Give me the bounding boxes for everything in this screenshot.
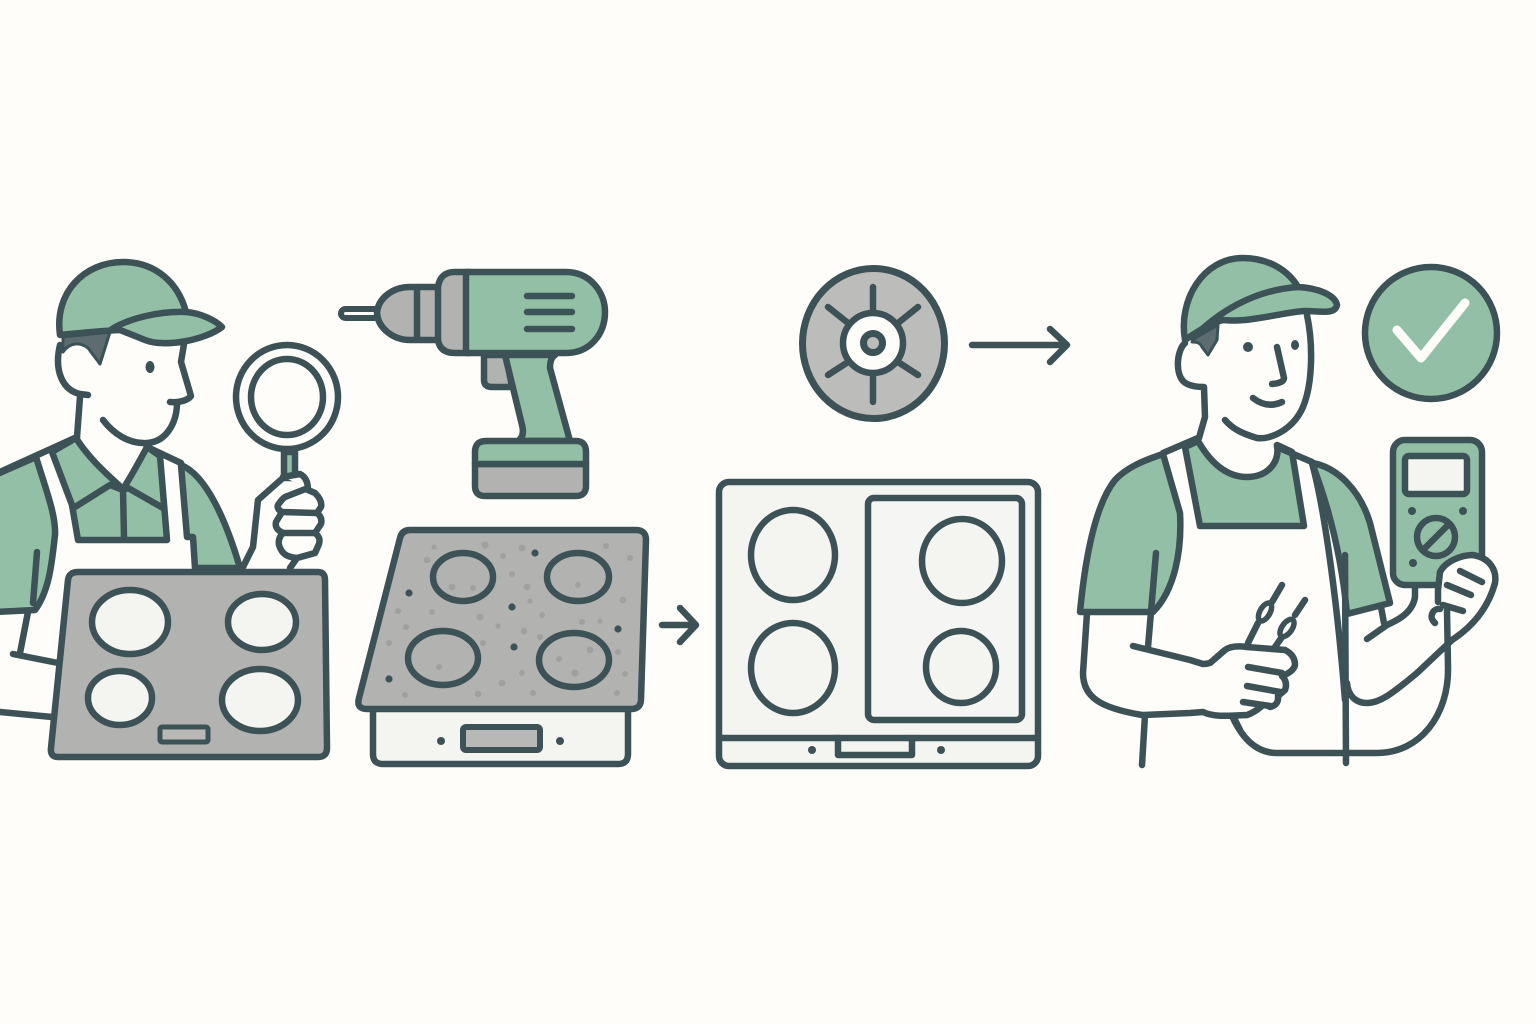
ear and neck — [1178, 343, 1205, 438]
multimeter dial — [1417, 518, 1455, 556]
slab burner bottom right — [539, 633, 609, 687]
cooktop: lifted top being opened — [358, 530, 646, 764]
cooktop: refitted — [719, 482, 1038, 766]
burner left top — [751, 510, 835, 600]
check mark — [1397, 303, 1465, 358]
chuck ridge — [414, 288, 420, 339]
worker inspecting with magnifier — [0, 262, 338, 717]
burner right top — [922, 519, 1002, 603]
eye — [146, 361, 154, 373]
cap brim line — [1193, 287, 1298, 338]
drill — [341, 272, 605, 496]
magnifier — [236, 345, 338, 449]
probes — [1248, 585, 1305, 647]
upper hand fingers — [1443, 571, 1482, 611]
shirt left sleeve — [1080, 454, 1180, 612]
base buttons — [437, 737, 564, 745]
trigger — [484, 355, 512, 387]
bottom rail — [720, 735, 1037, 741]
eyes — [1243, 340, 1299, 352]
right forearm — [1367, 587, 1415, 639]
badge circle — [1365, 267, 1497, 399]
cap — [59, 262, 222, 343]
shirt left sleeve — [0, 457, 55, 612]
shirt chest — [52, 438, 167, 540]
multimeter display — [1405, 456, 1467, 494]
multimeter dots — [1408, 507, 1467, 567]
collar lines — [75, 485, 163, 537]
slab burner bottom left — [408, 631, 478, 685]
burner element icon — [802, 268, 944, 418]
cooktop body — [51, 572, 327, 757]
control notch — [838, 738, 912, 755]
nose — [1272, 347, 1284, 384]
battery — [475, 441, 586, 496]
chuck nose — [377, 287, 440, 340]
drill body — [466, 272, 605, 353]
face — [1225, 315, 1311, 438]
raised arm — [243, 477, 284, 567]
shoulder and neck lines — [1163, 438, 1312, 462]
base control panel — [463, 727, 540, 750]
slab burner top right — [547, 553, 609, 601]
neck and ear — [58, 345, 88, 437]
left arm — [1083, 613, 1263, 765]
fist — [276, 474, 321, 568]
frame buttons — [808, 746, 945, 754]
cooktop: inspected — [51, 572, 327, 757]
right arm and hand outline — [1347, 555, 1495, 703]
hub — [843, 313, 903, 373]
shirt chest — [1185, 441, 1304, 526]
drill body rear section — [438, 272, 470, 353]
slab burner top left — [433, 553, 493, 601]
speckle texture — [386, 541, 633, 698]
burner top right — [228, 594, 296, 650]
lower hand fingers — [1235, 667, 1282, 730]
arrow: to testing — [972, 329, 1067, 362]
face profile — [103, 338, 191, 443]
test lead — [1233, 610, 1448, 753]
cap — [1184, 258, 1337, 340]
fist finger lines — [281, 512, 317, 533]
grip — [505, 355, 570, 441]
hair — [1192, 325, 1218, 355]
shirt right sleeve — [1312, 463, 1390, 614]
burner left bottom — [751, 623, 835, 713]
burner bottom right — [222, 669, 298, 731]
sleeve and apron lines — [1148, 463, 1346, 763]
hair — [63, 332, 110, 364]
outer frame — [719, 482, 1038, 766]
magnifier handle — [284, 452, 295, 478]
upper hand fill — [1438, 555, 1495, 642]
drill bit — [341, 309, 379, 318]
smile — [1253, 398, 1282, 405]
speckled top slab — [358, 530, 646, 709]
multimeter — [1393, 440, 1482, 585]
control panel — [160, 727, 208, 742]
burner bottom left — [88, 671, 152, 725]
check badge — [1365, 267, 1497, 399]
arrow: to new cooktop — [662, 608, 696, 642]
cap brim line — [112, 312, 186, 329]
hub centre — [864, 334, 882, 352]
spokes — [828, 287, 918, 402]
burner top left — [92, 590, 168, 654]
burner right bottom — [926, 631, 996, 703]
shirt right sleeve — [181, 465, 240, 568]
inner panel — [868, 498, 1022, 720]
shoulder and arm lines — [0, 437, 181, 717]
dark specks — [385, 549, 622, 683]
cooktop base — [373, 706, 628, 764]
worker testing with multimeter — [1080, 258, 1495, 765]
lower hand and forearm — [1133, 646, 1295, 707]
element disc — [802, 268, 944, 418]
vents — [527, 296, 572, 329]
